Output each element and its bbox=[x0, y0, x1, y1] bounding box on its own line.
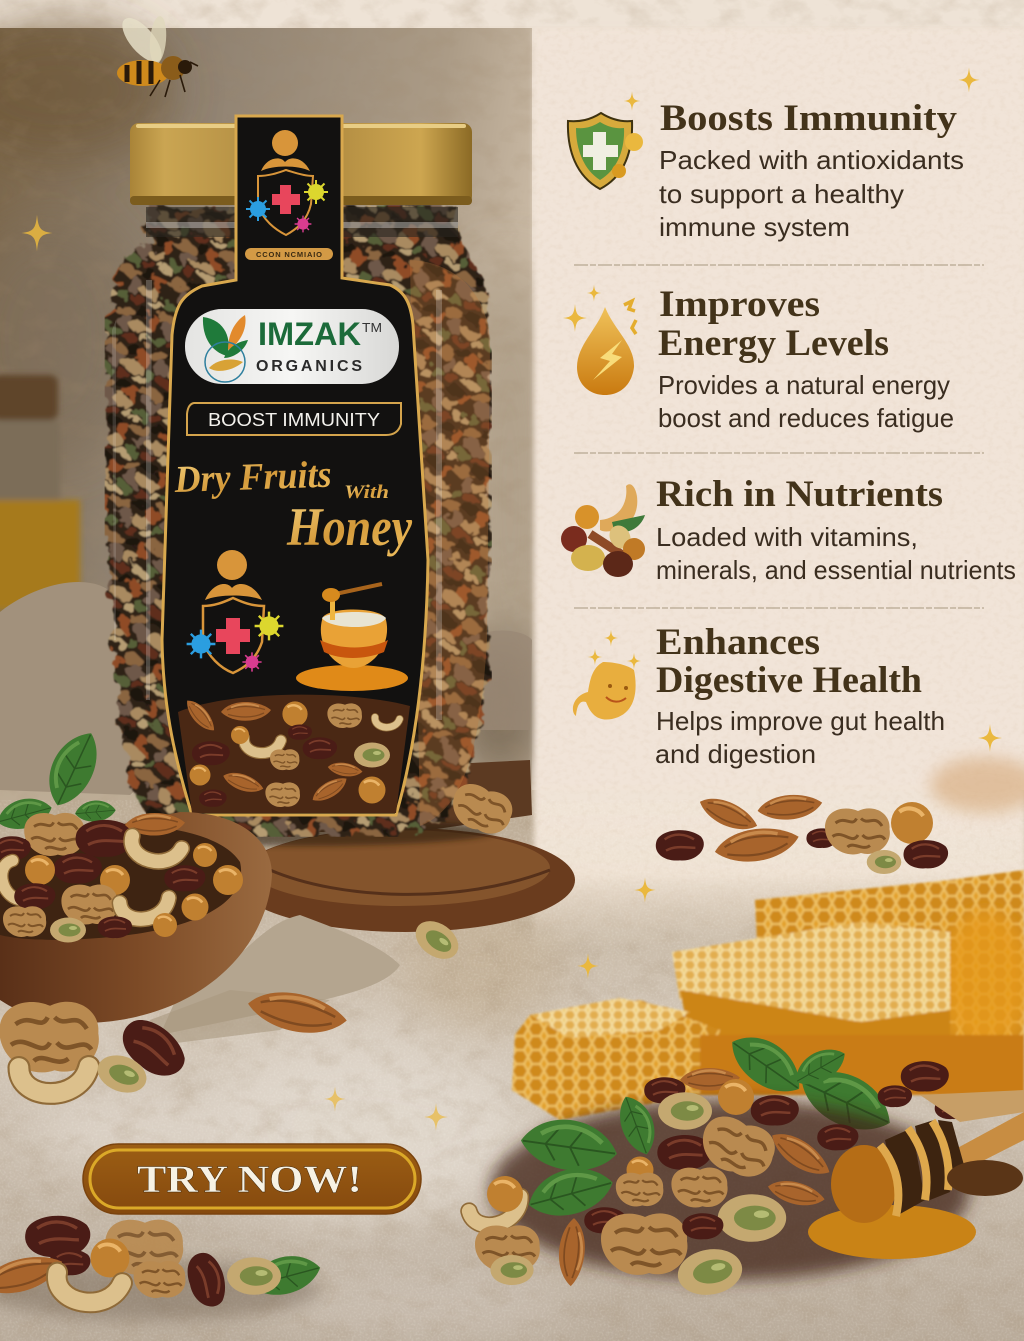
benefit: boosts immunity bbox=[568, 91, 964, 242]
burlap bbox=[160, 915, 400, 1035]
jar label bbox=[162, 116, 428, 815]
benefit: digestive health bbox=[573, 622, 945, 769]
honeycomb right bbox=[945, 890, 1024, 1090]
burlap shading bbox=[150, 990, 330, 1045]
call to action button: TRY NOW! bbox=[137, 1158, 362, 1201]
heading: Enhances bbox=[656, 622, 820, 663]
icon: mixed nuts bbox=[561, 484, 645, 577]
call to action button bbox=[83, 1144, 421, 1214]
honey puddle bbox=[808, 1205, 976, 1259]
dipper head bbox=[831, 1145, 897, 1223]
organics: ORGANICS bbox=[256, 358, 362, 375]
left nuts cluster bbox=[0, 1002, 194, 1099]
heading: Improves bbox=[659, 284, 820, 325]
product name script: Dry Fruits bbox=[173, 454, 332, 501]
wall shading bbox=[0, 20, 560, 790]
trademark: TM bbox=[362, 320, 382, 335]
jar shadow bbox=[105, 818, 495, 846]
heading bbox=[656, 622, 922, 701]
benefit: energy levels bbox=[563, 284, 954, 433]
brand logo pill bbox=[185, 309, 399, 384]
folded cloth bbox=[0, 582, 140, 795]
boost immunity box: BOOST IMMUNITY bbox=[208, 409, 380, 430]
icon: shield bbox=[568, 91, 643, 189]
product jar bbox=[105, 116, 495, 846]
logo leaf mark bbox=[203, 315, 248, 382]
description: to support a healthy bbox=[659, 179, 904, 209]
honeycomb front block bbox=[672, 922, 950, 1060]
honey block right lower bbox=[700, 1035, 1024, 1095]
strip small label bbox=[245, 248, 333, 260]
product name script bbox=[173, 454, 413, 557]
studio wall panel bbox=[0, 28, 532, 818]
wooden bowl with nuts bbox=[0, 724, 272, 1023]
description bbox=[658, 370, 954, 433]
fine grain bbox=[0, 800, 1024, 1341]
description: Provides a natural energy bbox=[658, 370, 950, 400]
brown nuts right edge bbox=[947, 1160, 1023, 1196]
boost immunity box bbox=[187, 403, 401, 435]
heading: Energy Levels bbox=[658, 323, 889, 364]
label icon: honey pot bbox=[296, 584, 408, 691]
description bbox=[655, 706, 945, 769]
strip icon: immunity bbox=[246, 130, 328, 235]
mint top bbox=[721, 1023, 901, 1144]
icon: honey drop bbox=[563, 285, 636, 395]
cloth right bbox=[470, 631, 532, 730]
walnut near jar bbox=[446, 779, 517, 840]
description: boost and reduces fatigue bbox=[658, 403, 954, 433]
heading: Rich in Nutrients bbox=[656, 474, 943, 515]
heading: Boosts Immunity bbox=[660, 98, 958, 139]
strip small label: CCON NCMIAIO bbox=[256, 250, 322, 259]
product name script: Honey bbox=[286, 497, 413, 557]
ground bbox=[0, 790, 1024, 1341]
background jar bbox=[0, 375, 80, 610]
handle bbox=[950, 1112, 1024, 1175]
icon: happy stomach bbox=[573, 630, 641, 720]
bottom left nuts cluster bbox=[0, 1216, 325, 1320]
sparkles bbox=[21, 67, 1002, 1131]
heading: Digestive Health bbox=[656, 660, 922, 701]
wood under dipper bbox=[920, 1090, 1024, 1122]
description: Loaded with vitamins, bbox=[656, 522, 918, 552]
description: and digestion bbox=[655, 739, 816, 769]
jar lid bbox=[130, 123, 472, 205]
honeycomb left slab bbox=[512, 998, 720, 1120]
brand name: IMZAK bbox=[258, 316, 361, 352]
wood table bbox=[140, 760, 532, 835]
label nuts bbox=[178, 695, 410, 813]
description bbox=[656, 522, 1016, 585]
wooden board bbox=[235, 828, 575, 932]
label icon: immunity bbox=[187, 550, 283, 673]
description: minerals, and essential nutrients bbox=[656, 555, 1016, 585]
jar glass highlights bbox=[112, 207, 458, 720]
top band bbox=[0, 0, 1024, 26]
almond on floor bbox=[244, 984, 350, 1042]
description bbox=[659, 145, 964, 242]
paper speckle bbox=[532, 28, 1024, 928]
nuts cluster top right bbox=[656, 791, 948, 874]
description: Packed with antioxidants bbox=[659, 145, 964, 175]
honeycomb right glow bbox=[940, 910, 1024, 1050]
honeycomb back bbox=[755, 870, 1024, 1000]
ground light patches bbox=[30, 890, 580, 1340]
benefit: nutrients bbox=[561, 474, 1016, 585]
heading bbox=[658, 284, 889, 364]
honey dipper bbox=[808, 1112, 1024, 1259]
product name script: With bbox=[344, 482, 389, 503]
right paper panel bbox=[534, 28, 1024, 950]
honeycomb group bbox=[512, 870, 1024, 1120]
mint leaves bbox=[0, 724, 117, 835]
jar warm right tint bbox=[410, 260, 490, 826]
pistachio on floor bbox=[409, 913, 465, 967]
bowl nuts bbox=[0, 813, 243, 942]
description: immune system bbox=[659, 212, 850, 242]
bee bbox=[115, 12, 198, 97]
description: Helps improve gut health bbox=[656, 706, 945, 736]
nuts pile bottom right bbox=[469, 1023, 970, 1300]
orange dust near paper corner bbox=[930, 757, 1024, 813]
jar body bbox=[105, 205, 492, 837]
